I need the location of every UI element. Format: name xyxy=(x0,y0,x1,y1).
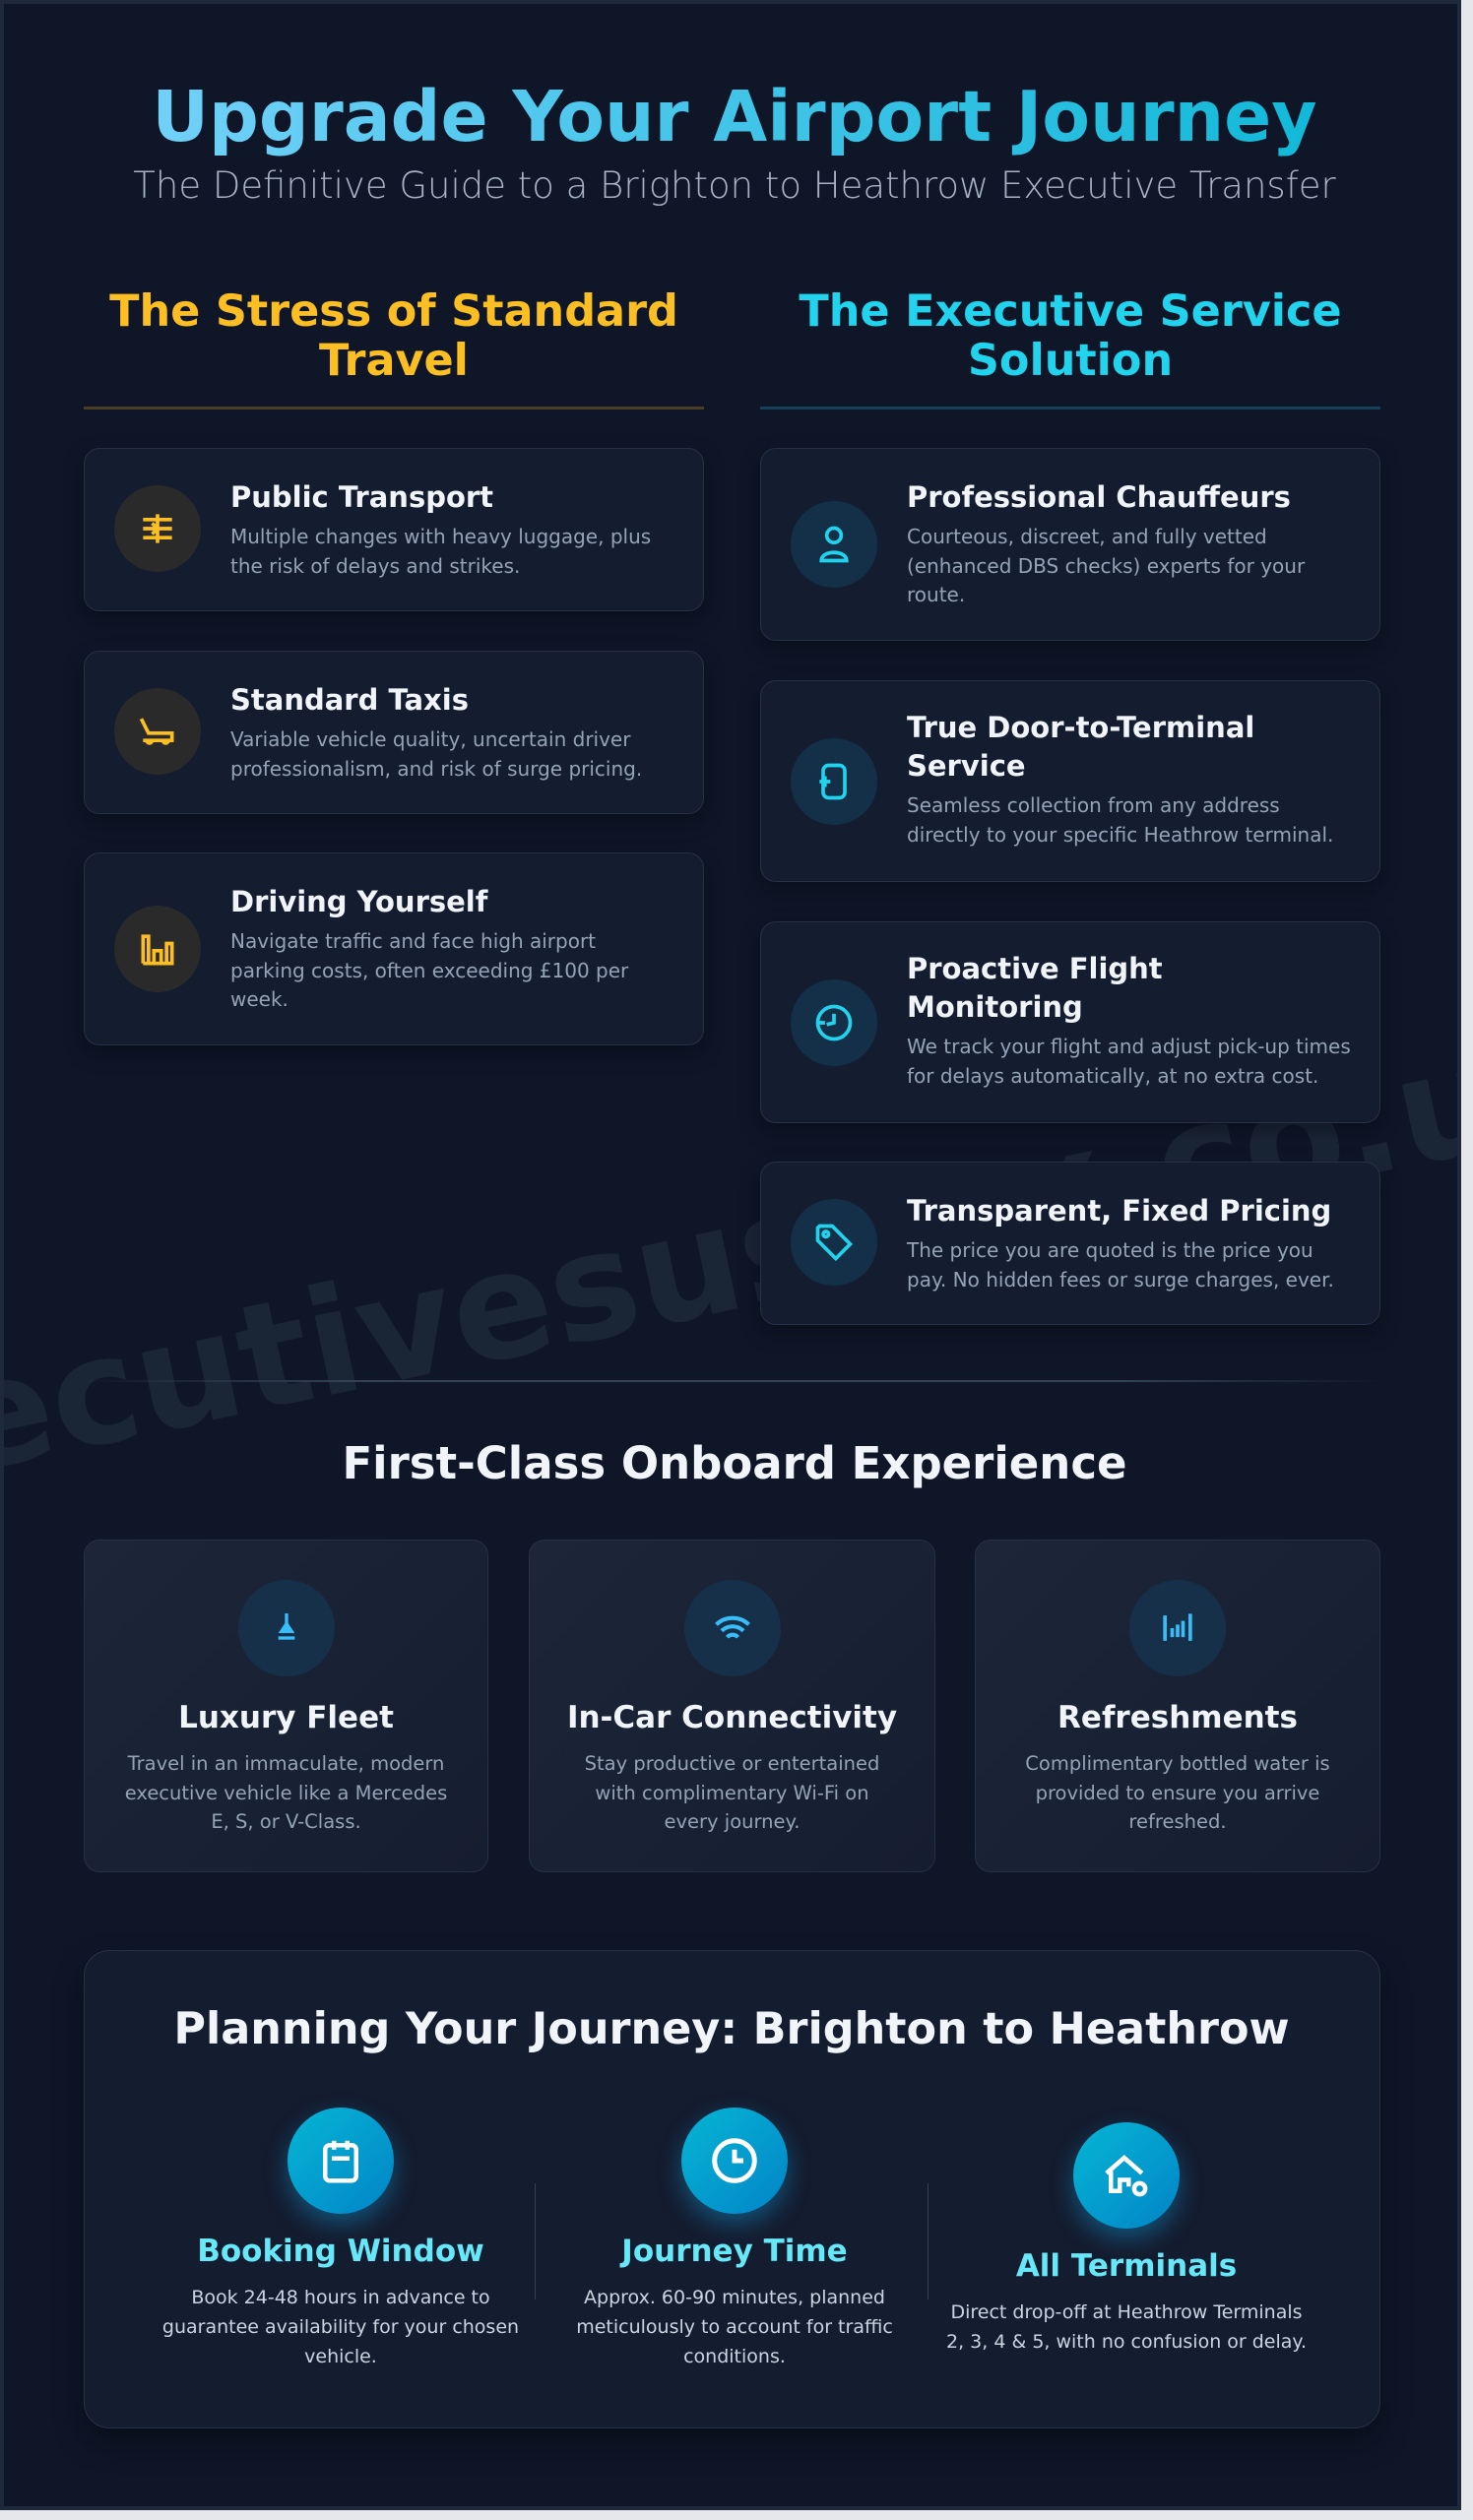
icon: door xyxy=(791,738,877,825)
heading: stress of standard travel: The Stress of Standard xyxy=(109,286,678,337)
icon: taxi xyxy=(114,688,201,775)
feature: connectivity xyxy=(529,1540,935,1872)
card: fixed pricing: The price you are quoted is the price you pay. No hidden fees or surge charges, ever. xyxy=(907,1238,1334,1292)
card: professional chauffeurs: Professional Chauffeurs xyxy=(907,480,1291,514)
icon: clock xyxy=(681,2108,788,2214)
subtitle: The Definitive Guide to a Brighton to Heathrow Executive Transfer xyxy=(133,164,1336,207)
heading: planning: Planning Your Journey: Brighton to Heathrow xyxy=(173,2004,1290,2054)
icon: drinks xyxy=(1129,1580,1226,1676)
card: professional chauffeurs xyxy=(760,448,1380,641)
step: booking window: Booking Window xyxy=(197,2234,484,2269)
icon: parking xyxy=(114,906,201,992)
card: flight monitoring: Proactive Flight Monitoring xyxy=(907,952,1163,1024)
step: journey time: Journey Time xyxy=(621,2234,848,2269)
icon: clock xyxy=(791,979,877,1066)
feature: refreshments xyxy=(975,1540,1380,1872)
card: standard taxis xyxy=(84,651,704,814)
heading: first-class onboard: First-Class Onboard Experience xyxy=(342,1437,1127,1489)
feature: luxury fleet: Travel in an immaculate, modern executive vehicle like a Mercedes E, S, or V-Class. xyxy=(125,1752,447,1833)
heading: stress of standard travel: Travel xyxy=(319,336,469,386)
feature: luxury fleet: Luxury Fleet xyxy=(178,1700,394,1735)
card: driving yourself: Navigate traffic and face high airport parking costs, often exceeding £100 per week. xyxy=(230,929,628,1011)
heading: executive service solution: The Executive Service xyxy=(799,286,1342,337)
card: fixed pricing: Transparent, Fixed Pricing xyxy=(907,1194,1331,1228)
icon: calendar xyxy=(288,2108,394,2214)
step: booking window xyxy=(162,2106,519,2367)
card: door-to-terminal: True Door-to-Terminal Service xyxy=(907,711,1254,783)
step: all terminals xyxy=(946,2120,1307,2353)
card: professional chauffeurs: Courteous, discreet, and fully vetted (enhanced DBS checks) experts for your route. xyxy=(907,525,1305,606)
card: driving yourself xyxy=(84,852,704,1045)
panel: planning your journey xyxy=(84,1950,1380,2428)
card: public transport: Public Transport xyxy=(230,480,493,514)
icon: car xyxy=(238,1580,335,1676)
feature: connectivity: In-Car Connectivity xyxy=(567,1700,897,1735)
step: all terminals: All Terminals xyxy=(1016,2248,1237,2284)
card: standard taxis: Standard Taxis xyxy=(230,683,469,717)
step: all terminals: Direct drop-off at Heathrow Terminals 2, 3, 4 & 5, with no confusion or delay. xyxy=(946,2301,1307,2353)
heading: executive service solution xyxy=(799,286,1342,386)
feature: connectivity: Stay productive or entertained with complimentary Wi-Fi on every journey. xyxy=(585,1752,879,1833)
icon: wifi xyxy=(683,1580,780,1676)
card: public transport xyxy=(84,448,704,611)
card: standard taxis: Variable vehicle quality, uncertain driver professionalism, and risk of surge pricing. xyxy=(230,727,642,780)
icon: transport xyxy=(114,485,201,572)
feature: refreshments: Refreshments xyxy=(1057,1700,1298,1735)
card: public transport: Multiple changes with heavy luggage, plus the risk of delays and strikes. xyxy=(230,525,651,577)
title: Upgrade Your Airport Journey xyxy=(152,76,1317,158)
feature: luxury fleet xyxy=(84,1540,488,1872)
card: flight monitoring xyxy=(760,921,1380,1123)
step: journey time xyxy=(576,2106,893,2367)
icon: house xyxy=(1073,2122,1180,2229)
card: fixed pricing xyxy=(760,1162,1380,1325)
heading: stress of standard travel xyxy=(109,286,678,386)
step: journey time: Approx. 60-90 minutes, planned meticulously to account for traffic conditions. xyxy=(576,2287,893,2367)
icon: tag xyxy=(791,1199,877,1286)
card: flight monitoring: We track your flight and adjust pick-up times for delays automatically, at no extra cost. xyxy=(907,1035,1351,1087)
step: booking window: Book 24-48 hours in advance to guarantee availability for your chosen vehicle. xyxy=(162,2287,519,2367)
card: door-to-terminal xyxy=(760,680,1380,882)
card: door-to-terminal: Seamless collection from any address directly to your specific Heathrow terminal. xyxy=(907,793,1333,847)
heading: executive service solution: Solution xyxy=(968,336,1173,386)
feature: refreshments: Complimentary bottled water is provided to ensure you arrive refreshed. xyxy=(1025,1752,1330,1833)
card: driving yourself: Driving Yourself xyxy=(230,885,487,918)
icon: person xyxy=(791,501,877,588)
